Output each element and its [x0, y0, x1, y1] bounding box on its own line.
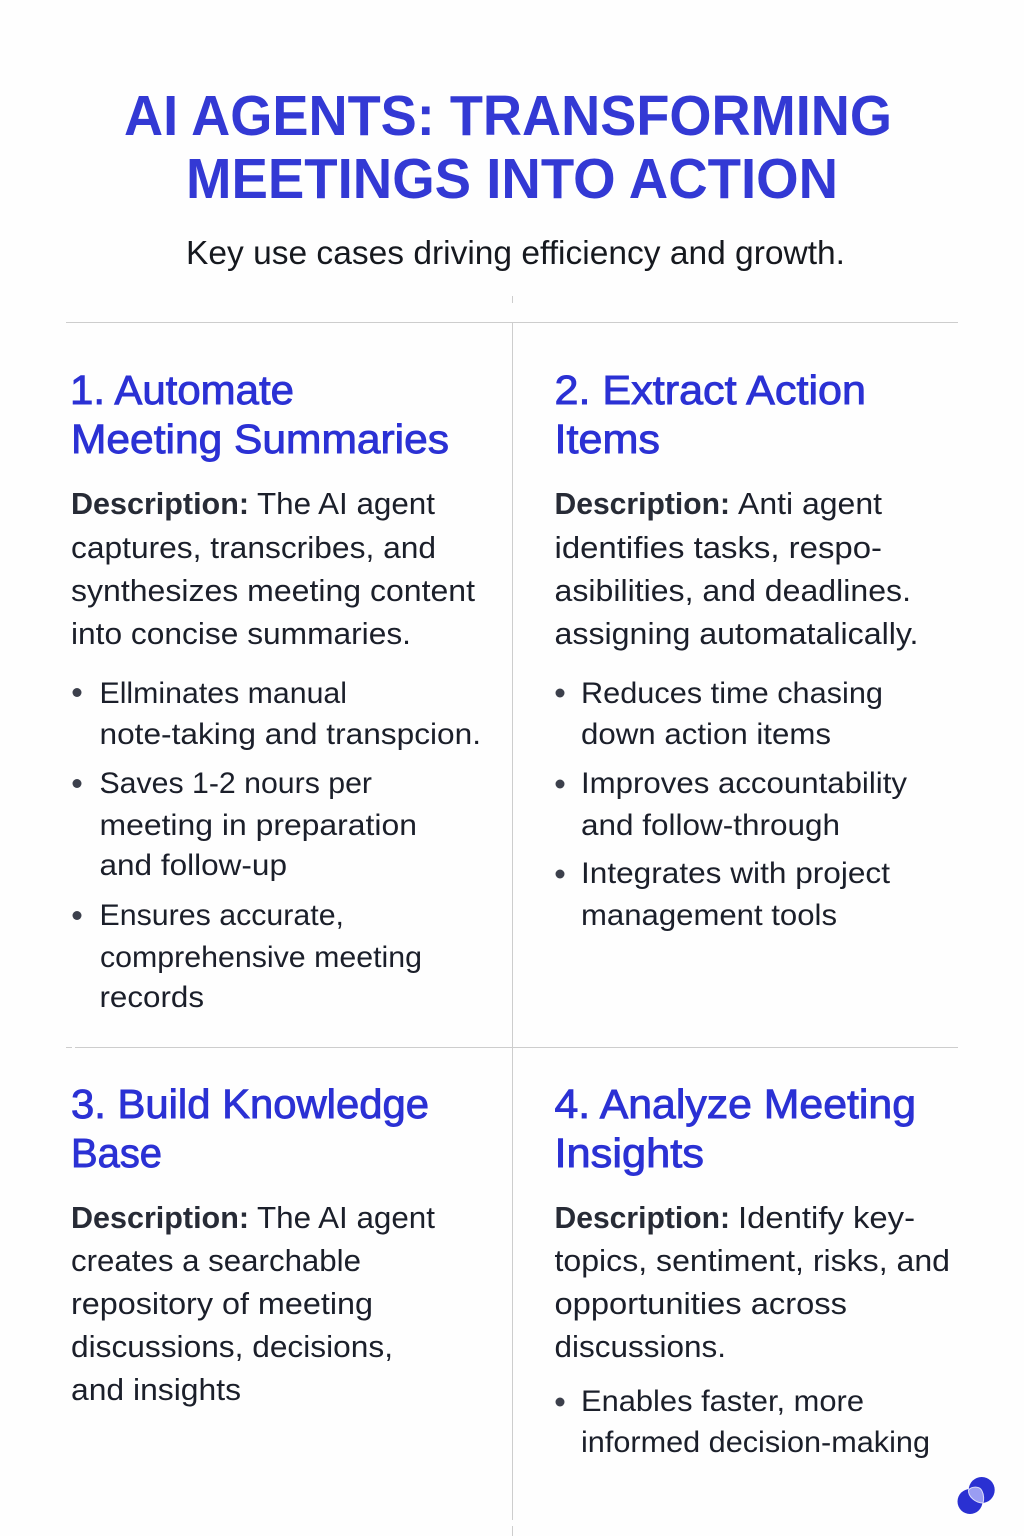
title: MEETINGS INTO ACTION — [186, 147, 838, 211]
description: section 3: creates a searchable — [71, 1243, 361, 1278]
description: section 2: assigning automatalically. — [554, 616, 918, 651]
bullet list: section 1: Ensures accurate, — [100, 899, 344, 932]
heading: section 1: 1. Automate — [70, 367, 294, 413]
description: section 2: Anti agent — [738, 486, 882, 521]
bullet list: section 1: records — [100, 981, 204, 1014]
bullet list: section 1: comprehensive meeting — [100, 941, 422, 974]
title — [124, 84, 892, 211]
description: section 1: captures, transcribes, and — [71, 530, 436, 565]
description: section 4 — [554, 1200, 950, 1364]
heading: section 3 — [71, 1081, 429, 1176]
bullet list: section 2: down action items — [581, 718, 831, 751]
description: section 3: Description: — [71, 1200, 249, 1235]
heading: section 2: 2. Extract Action — [554, 367, 866, 413]
description: section 4: opportunities across — [554, 1286, 847, 1321]
bullet list: section 1: Saves 1-2 nours per — [100, 767, 372, 800]
panel: analyze meeting insights — [554, 1081, 950, 1459]
subtitle: Key use cases driving efficiency and growth. — [186, 234, 845, 271]
bullet list: section 4: Enables faster, more — [581, 1385, 864, 1418]
description: section 3: The AI agent — [257, 1200, 435, 1235]
description: section 1: synthesizes meeting content — [71, 573, 475, 608]
panel: automate meeting summaries — [70, 367, 481, 1014]
heading: section 3: 3. Build Knowledge — [71, 1081, 429, 1127]
bullet list: section 1: Ellminates manual — [100, 677, 347, 710]
description: section 2: asibilities, and deadlines. — [554, 573, 911, 608]
panel: build knowledge base — [71, 1081, 435, 1407]
description: section 1: Description: — [71, 486, 249, 521]
description: section 4: discussions. — [554, 1329, 726, 1364]
description: section 4: topics, sentiment, risks, and — [554, 1243, 950, 1278]
bullet list: section 2: Improves accountability — [581, 767, 907, 800]
bullet list: section 2: and follow-through — [581, 809, 840, 842]
bullet list: section 2: Reduces time chasing — [581, 677, 883, 710]
description: section 2 — [554, 486, 918, 651]
heading: section 4: Insights — [554, 1130, 704, 1176]
bullet list: section 1 — [72, 677, 481, 1014]
panel: extract action items — [554, 367, 918, 932]
title: AI AGENTS: TRANSFORMING — [124, 84, 892, 148]
description: section 2: identifies tasks, respo- — [554, 530, 882, 565]
icon: logo — [958, 1477, 995, 1514]
heading: section 4 — [554, 1081, 916, 1176]
bullet list: section 1: meeting in preparation — [100, 809, 417, 842]
bullet list: section 1: note-taking and transpcion. — [100, 718, 481, 751]
bullet list: section 1: and follow-up — [100, 849, 287, 882]
bullet list: section 2 — [556, 677, 907, 932]
heading: section 1 — [70, 367, 449, 462]
description: section 4: Identify key- — [738, 1200, 915, 1235]
bullet list: section 4 — [556, 1385, 930, 1459]
description: section 3 — [71, 1200, 435, 1407]
description: section 3: discussions, decisions, — [71, 1329, 393, 1364]
description: section 3: and insights — [71, 1372, 241, 1407]
bullet list: section 2: management tools — [581, 899, 837, 932]
bullet list: section 4: informed decision-making — [581, 1426, 930, 1459]
description: section 1: The AI agent — [257, 486, 435, 521]
heading: section 2: Items — [554, 416, 660, 462]
description: section 4: Description: — [554, 1200, 730, 1235]
heading: section 3: Base — [71, 1130, 162, 1176]
heading: section 1: Meeting Summaries — [71, 416, 449, 462]
description: section 1: into concise summaries. — [71, 616, 411, 651]
bullet list: section 2: Integrates with project — [581, 857, 891, 890]
description: section 3: repository of meeting — [71, 1286, 373, 1321]
description: section 1 — [71, 486, 475, 651]
heading: section 2 — [554, 367, 866, 462]
heading: section 4: 4. Analyze Meeting — [554, 1081, 916, 1127]
description: section 2: Description: — [554, 486, 730, 521]
